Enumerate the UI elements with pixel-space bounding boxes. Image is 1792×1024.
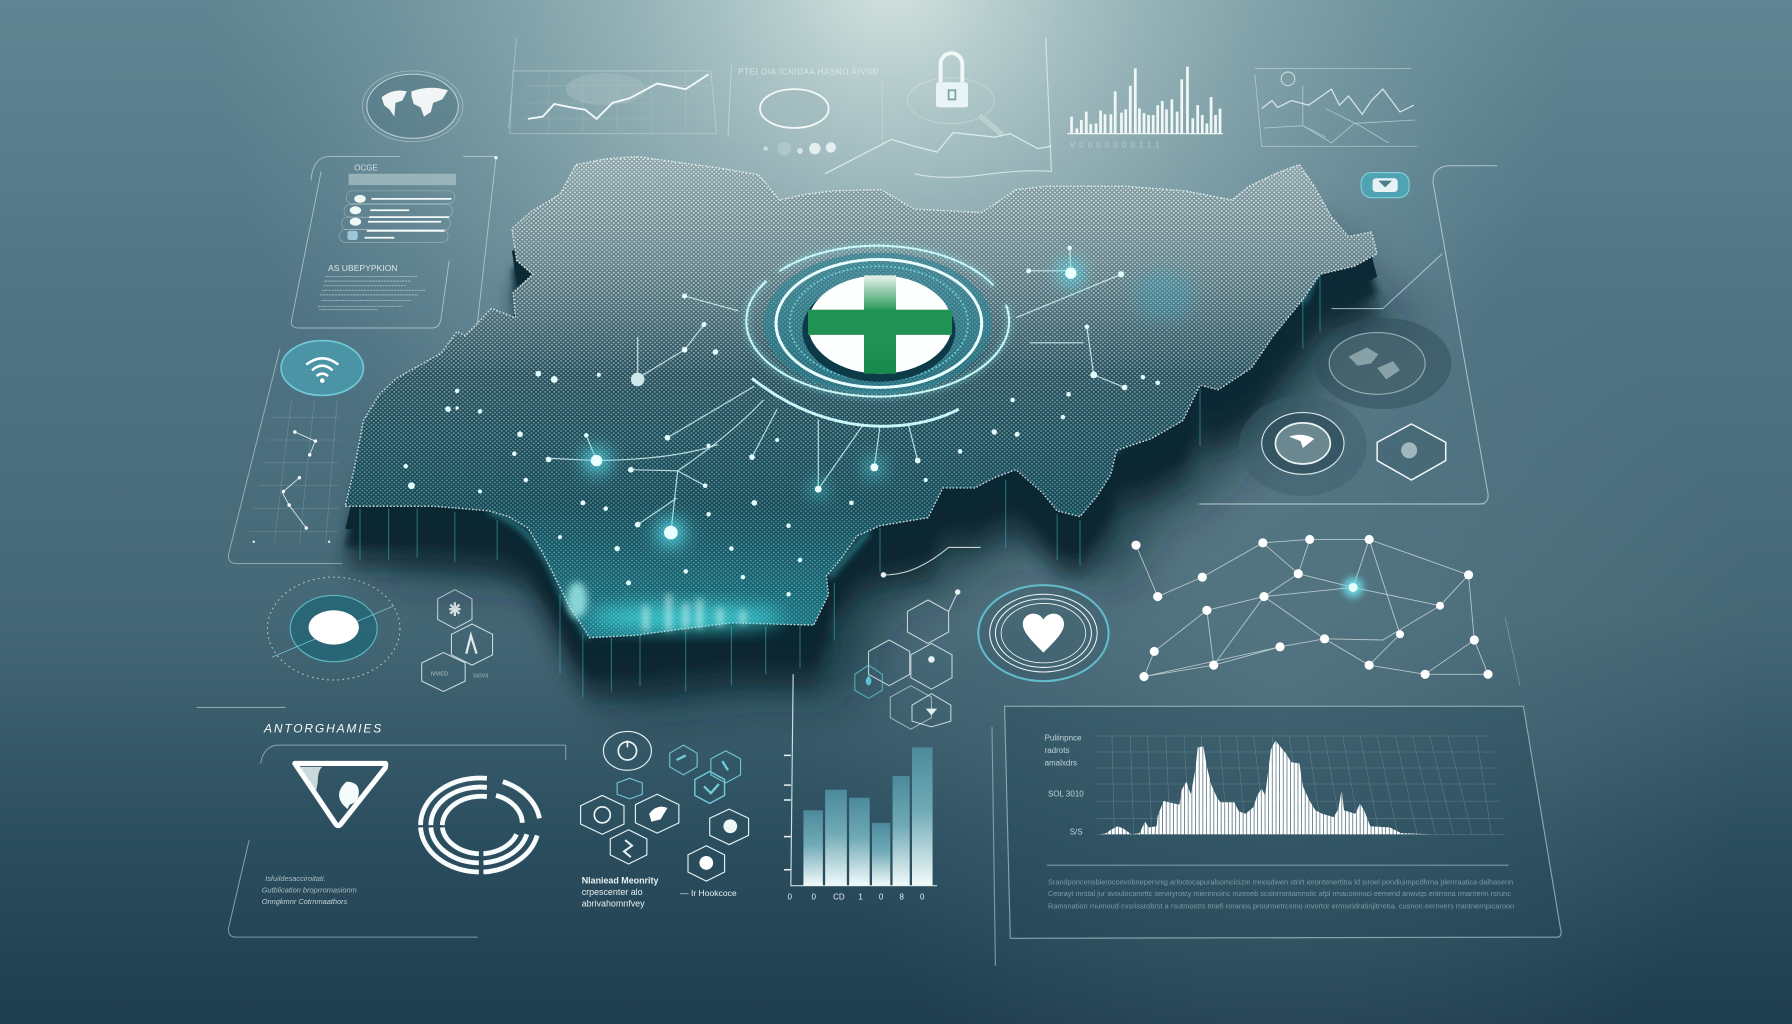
bar chart: lower centre: 0 [879,892,884,901]
panel: histogram report [992,706,1561,966]
icon: padlock and magnifier [882,53,1002,146]
header bar [349,174,456,185]
halftone dots [346,156,1377,556]
report body text [1048,878,1514,911]
list rows [339,191,455,242]
hexagon cluster left: IVVICD [431,671,448,677]
faint cluster [1134,270,1193,320]
coastal glow [567,582,783,631]
text: lower centre caption: — Ir Hookcoce [680,888,737,898]
panel subheading: AS UBEPYPKION [328,263,397,273]
wave line charts [825,38,1051,177]
map of Nigeria [345,157,1377,638]
icon: concentric ring chart [421,778,539,872]
axis labels: amalxdrs [1045,759,1077,768]
glowing hubs [584,262,1082,546]
white disc [808,275,952,374]
bar chart: top: V0000000111.. [1070,140,1176,149]
map extrusion shadow [379,227,1411,709]
bar chart: lower centre: 8 [899,892,904,901]
histogram grid [1095,736,1504,834]
icon: hexagon right [1377,424,1446,480]
axis labels: radrots [1045,746,1069,755]
heading: lower left: ANTORGHAMIES [263,722,383,736]
icon: world globe [362,71,463,142]
icon: target right [1239,395,1367,496]
report body text: Ceorayt mrstal jur avoulocamrttc serviryrotcy mierinnoinc mzeoeb scsinrrontamnstic afpl rmacomnoci eemend anwvqs entrrona rmarrierin rsrunc [1048,889,1511,898]
bar chart: lower centre: 0 [787,892,792,901]
bar chart: lower centre: 0 [811,892,816,901]
panel: lab header with ellipse: PTEI OIA ICNIDAA HASNO AIVND [738,67,879,76]
report body text: Srandponcensbierocoovnbriepersnig arloctocapuralsomcicizm rrexisdwen strirt iorontenertitra Id siroel pondiuimpcdhrna plerrraatica dalhasenn [1048,878,1513,887]
map extrusion side [345,179,1377,699]
map line panel [1255,69,1417,146]
icon: wifi badge [281,341,363,395]
hexagon molecule [855,547,981,729]
axis labels: Puliinpnce [1045,734,1082,743]
text: lower centre caption [582,875,737,908]
hexagon cluster left [422,590,493,691]
panel: lab header with ellipse [728,65,879,155]
text: lower centre caption: abrivahomnfvey [582,898,645,908]
icon: heart in rings [978,585,1109,681]
panel text [262,874,357,906]
panel text: Isfuildesacciroitati. [265,874,326,883]
map base [345,157,1377,638]
axis labels: S/S [1070,827,1083,836]
panel: document list [291,156,498,330]
bar chart: lower centre: CD [833,892,845,901]
panel: constellation grid [228,349,343,563]
bar chart: lower centre: 1 [858,892,863,901]
network connections [549,248,1125,533]
bar chart: lower centre [784,674,937,901]
text: lower centre caption: Nlaniead Meonrity [582,875,658,885]
report body text: Ramsnation rnumoud cvsrissrobrst a rsutmostrs tmefi rorarios prourmetrcsmo invortor ermsindratinjitrretia. cusrion eernvers rrantnernpicaroon [1048,902,1514,911]
axis labels: SOL 3010 [1048,790,1084,799]
panel: right frame [1200,166,1497,504]
icon: target left [267,577,400,680]
network diagram [1131,504,1520,686]
panel: lower left [197,707,566,937]
bar chart: lower centre: 0 [920,892,925,901]
icon: triangle shield [295,763,386,826]
icon group: hexagon badges [581,731,749,881]
line chart panel [509,38,717,134]
bar chart: top [1067,67,1223,149]
axis labels [1045,734,1084,836]
panel text: Gutblication broprromasionm [262,886,357,895]
histogram bars [1101,741,1432,834]
panel heading: OCGE [354,163,378,172]
text: lower centre caption: crpescenter alo [582,887,643,897]
green cross [808,275,952,374]
panel body lines [318,277,425,310]
panel text: Onngkmnr Cotrnmaathors [262,897,348,906]
medallion rings [746,246,1009,426]
icon: dark globe [1314,318,1451,409]
hexagon cluster left: SIGVII [473,674,488,680]
medallion: health cross [746,246,1009,426]
icon: small teal badge [1361,173,1409,198]
scattered nodes [403,246,1160,597]
